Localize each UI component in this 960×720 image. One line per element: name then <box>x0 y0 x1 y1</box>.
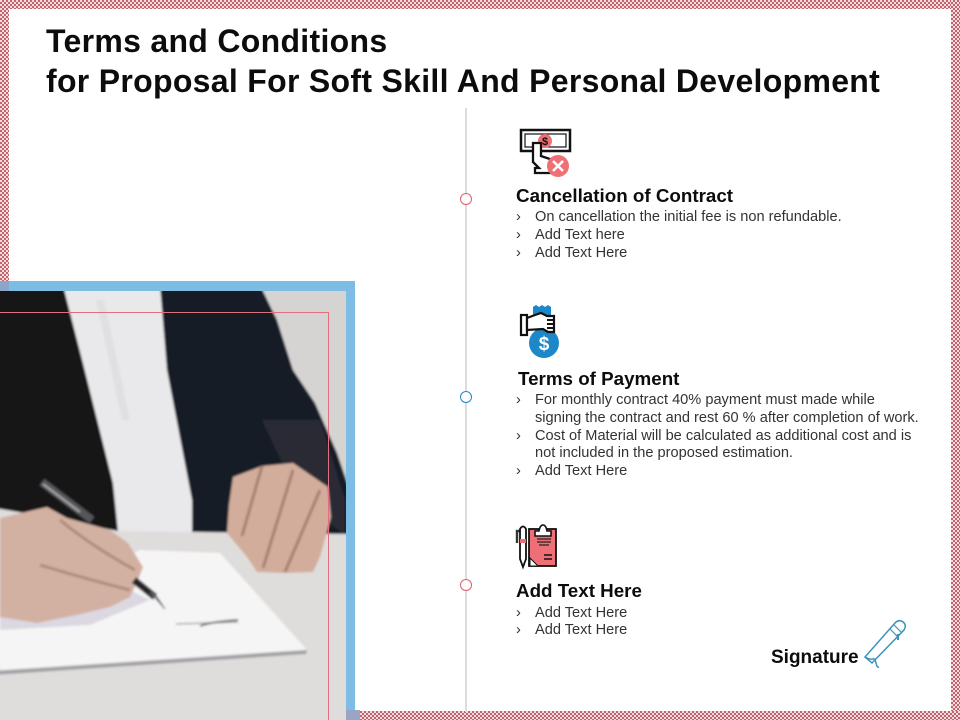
section: terms of payment: Cost of Material will be calculated as additional cost and is <box>535 428 911 444</box>
bullet list: › <box>516 428 521 444</box>
bullet list: › <box>516 209 521 225</box>
bullet list: › <box>516 604 521 620</box>
icon: cancelled payment <box>520 128 572 177</box>
section: add text here: Add Text Here <box>535 622 627 638</box>
bullet list: › <box>516 463 521 479</box>
section: terms of payment: For monthly contract 40% payment must made while <box>535 392 875 408</box>
icon: hand with money bag <box>520 305 559 358</box>
section: cancellation of contract <box>516 185 842 261</box>
bullet list: › <box>516 392 521 408</box>
section: cancellation of contract: Add Text here <box>535 227 625 243</box>
bullet list: › <box>516 227 521 243</box>
title: for Proposal For Soft Skill And Personal Development <box>46 63 880 99</box>
heading: Add Text Here <box>516 580 642 601</box>
section: cancellation of contract: Add Text Here <box>535 245 627 261</box>
heading: Terms of Payment <box>518 368 679 389</box>
timeline with markers <box>460 108 472 712</box>
section: terms of payment: Add Text Here <box>535 463 627 479</box>
section: add text here: Add Text Here <box>535 604 627 620</box>
title <box>46 23 880 99</box>
section: terms of payment: not included in the proposed estimation. <box>535 445 793 461</box>
icon: signature pen <box>864 620 906 668</box>
bullet list <box>516 392 919 479</box>
section: cancellation of contract: On cancellation the initial fee is non refundable. <box>535 209 842 225</box>
photo panel: hand signing a document <box>0 281 360 720</box>
section: add text here <box>516 580 642 638</box>
icon: hand with money bag: $ <box>539 334 550 355</box>
icon: pen and clipboard <box>516 524 557 570</box>
bullet list: › <box>516 245 521 261</box>
section: terms of payment: signing the contract and rest 60 % after completion of work. <box>535 410 919 426</box>
signature label: Signature <box>771 647 859 668</box>
bullet list <box>516 604 627 638</box>
bullet list: › <box>516 622 521 638</box>
bullet list <box>516 209 842 261</box>
icon: cancelled payment: $ <box>542 136 548 148</box>
title: Terms and Conditions <box>46 23 387 59</box>
section: terms of payment <box>516 368 919 479</box>
heading: Cancellation of Contract <box>516 185 733 206</box>
